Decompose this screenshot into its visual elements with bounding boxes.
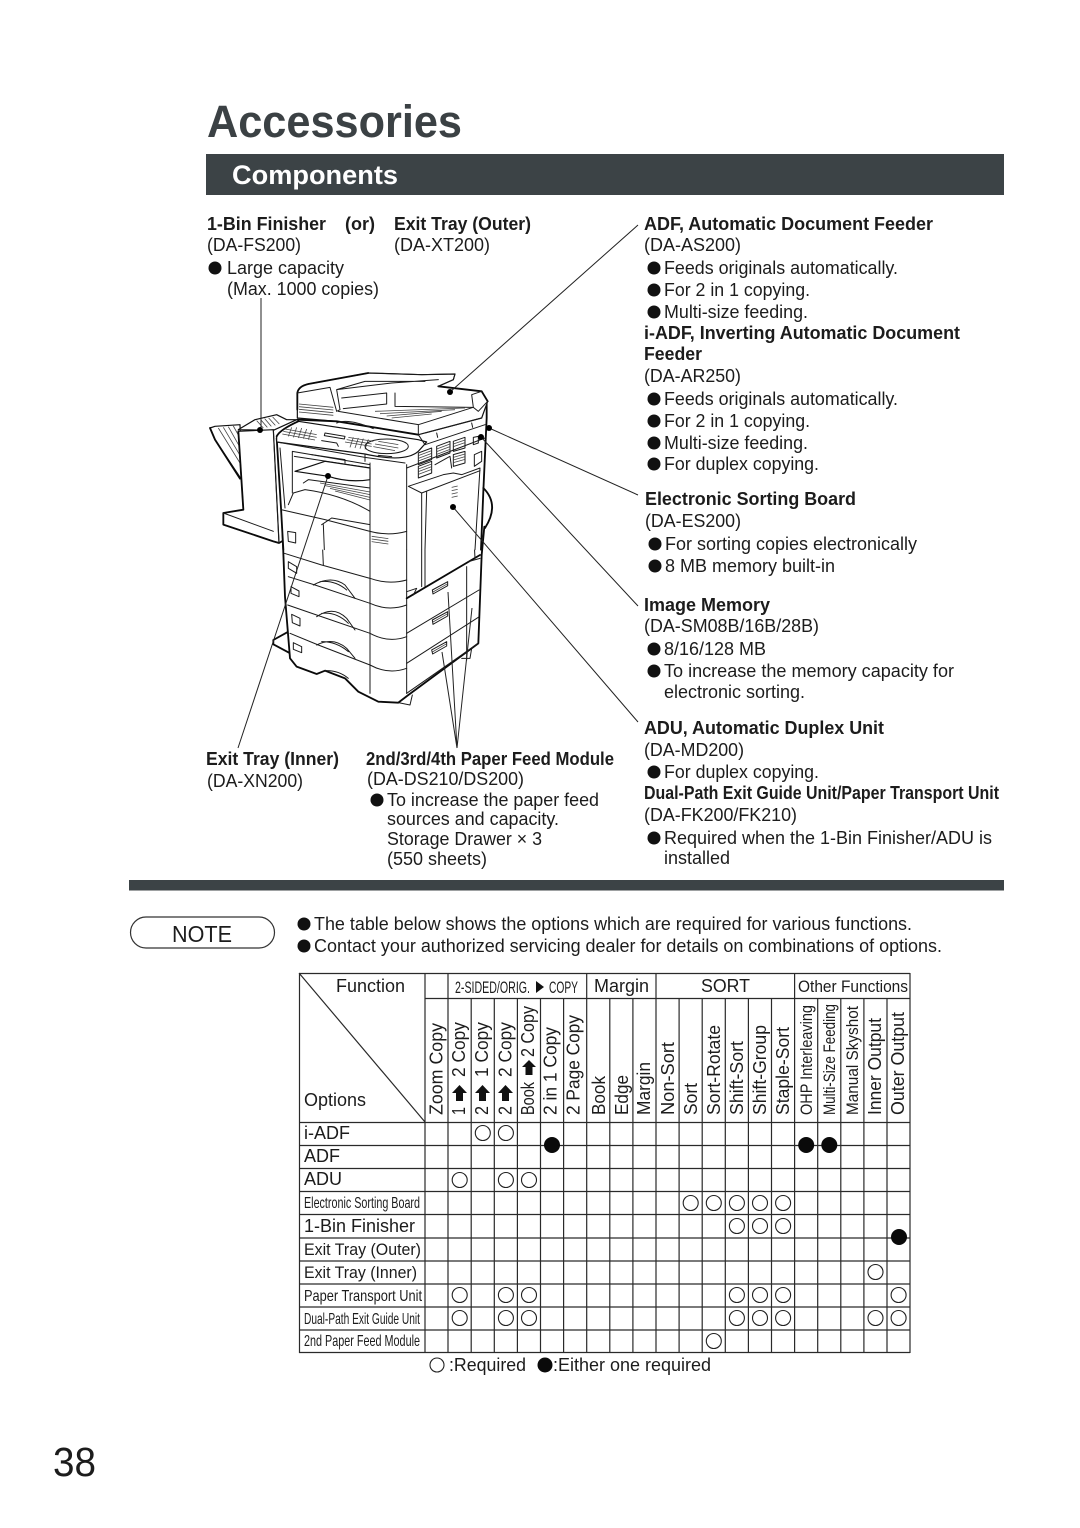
text block: ADF: Multi-size feeding. [664,302,808,322]
text block: image memory: electronic sorting. [664,682,805,702]
note badge: NOTE [172,921,232,947]
text block: image memory: 8/16/128 MB [664,639,766,659]
table group headers: COPY [549,978,578,997]
text block: i-ADF: For 2 in 1 copying. [664,411,810,431]
text block: finisher and exit tray outer: (DA-FS200) [207,235,301,255]
text block: paper feed module: Storage Drawer × 3 [387,829,542,849]
table group headers: Other Functions [798,977,908,996]
text block: exit tray inner [206,749,339,791]
text block: ADU and exit guide unit: installed [664,848,730,868]
text block: finisher and exit tray outer: (DA-XT200) [394,235,490,255]
text block: ADU and exit guide unit: (DA-MD200) [644,740,744,760]
text block: ADU and exit guide unit: ADU, Automatic Duplex Unit [644,718,884,738]
text block: paper feed module [366,749,614,869]
text block: exit tray inner: (DA-XN200) [207,771,303,791]
text block: image memory: (DA-SM08B/16B/28B) [644,616,819,636]
text block: i-ADF [644,323,960,474]
table row labels [304,1123,422,1350]
table legend: :Either one required [553,1355,711,1375]
text block: finisher and exit tray outer: 1-Bin Finisher [207,214,326,234]
text block: electronic sorting board: Electronic Sorting Board [645,489,856,509]
table column headers: Edge [612,1075,632,1115]
table column headers [426,1004,908,1115]
either-one markers [544,1137,907,1245]
table column headers: 2 [496,1106,516,1115]
table group headers: Margin [594,976,649,996]
table legend: :Required [449,1355,526,1375]
text block: i-ADF: Feeds originals automatically. [664,389,898,409]
text block: image memory: Image Memory [644,595,770,615]
illustration: copier with accessories [210,373,492,705]
table row labels: ADF [304,1146,340,1166]
text block: ADF: (DA-AS200) [644,235,741,255]
text block: ADF: ADF, Automatic Document Feeder [644,214,933,234]
table group headers: Options [304,1090,366,1110]
note text: Contact your authorized servicing dealer for details on combinations of options. [314,936,942,956]
table row labels: Exit Tray (Inner) [304,1263,417,1282]
table column headers: Margin [634,1062,654,1115]
text block: paper feed module: (550 sheets) [387,849,487,869]
text block: paper feed module: 2nd/3rd/4th Paper Feed Module [366,749,614,769]
table row labels: Dual-Path Exit Guide Unit [304,1311,420,1328]
table row labels: i-ADF [304,1123,350,1143]
text block: i-ADF: i-ADF, Inverting Automatic Document [644,323,960,343]
text block: i-ADF: Feeder [644,344,702,364]
text block: ADF [644,214,933,322]
table column headers: Shift-Sort [727,1041,747,1115]
table row labels: Electronic Sorting Board [304,1195,420,1212]
table group headers [304,976,908,1110]
text block: electronic sorting board: For sorting copies electronically [665,534,917,554]
options table [299,973,910,1353]
table grid [299,973,910,1353]
finisher and machine upper half [210,373,492,550]
table column headers: Staple-Sort [773,1027,793,1115]
table row labels: Paper Transport Unit [304,1288,422,1305]
note badge [130,917,274,948]
table column headers: Book [518,1081,538,1115]
machine lower half [273,527,484,705]
text block: finisher and exit tray outer [207,214,531,299]
table column headers: Book [589,1075,609,1115]
text block: ADU and exit guide unit [644,718,999,868]
table column headers: Non-Sort [658,1042,678,1115]
required markers [452,1126,906,1348]
heading band: components: Components [232,160,398,190]
note text [298,914,942,956]
text block: finisher and exit tray outer: (Max. 1000 copies) [227,279,379,299]
text block: finisher and exit tray outer: Large capacity [227,258,344,278]
text block: electronic sorting board [645,489,917,576]
text block: ADF: For 2 in 1 copying. [664,280,810,300]
divider bar [129,880,1004,890]
text block: ADU and exit guide unit: (DA-FK200/FK210) [644,805,797,825]
table column headers: Multi-Size Feeding [820,1004,839,1115]
table group headers: SORT [701,976,750,996]
table row labels: Exit Tray (Outer) [304,1240,421,1259]
text block: finisher and exit tray outer: Exit Tray (Outer) [394,214,531,234]
heading band: components [206,154,1004,195]
table column headers: 2 Copy [518,1006,538,1057]
text block: paper feed module: (DA-DS210/DS200) [367,769,524,789]
text block: image memory [644,595,954,702]
table column headers: 2 [472,1106,492,1115]
table column headers: Sort [681,1083,701,1115]
note text: The table below shows the options which are required for various functions. [314,914,912,934]
text block: finisher and exit tray outer: (or) [345,214,375,234]
table column headers: OHP Interleaving [797,1005,816,1115]
text block: paper feed module: sources and capacity. [387,809,559,829]
text block: paper feed module: To increase the paper feed [387,790,599,810]
leader lines and dots [238,225,638,748]
table column headers: 2 Copy [449,1022,469,1077]
table row labels: 1-Bin Finisher [304,1216,415,1236]
text block: electronic sorting board: (DA-ES200) [645,511,741,531]
table row labels: ADU [304,1169,342,1189]
text block: i-ADF: (DA-AR250) [644,366,741,386]
text block: ADU and exit guide unit: Dual-Path Exit Guide Unit/Paper Transport Unit [644,783,999,803]
table column headers: Manual Skyshot [843,1006,862,1115]
table column headers: Sort-Rotate [704,1025,724,1115]
text block: ADU and exit guide unit: For duplex copying. [664,762,819,782]
table column headers: 1 [449,1107,469,1115]
table column headers: 2 Page Copy [564,1015,584,1115]
text block: exit tray inner: Exit Tray (Inner) [206,749,339,769]
text block: image memory: To increase the memory capacity for [664,661,954,681]
table column headers: 2 Copy [496,1022,516,1077]
text block: i-ADF: Multi-size feeding. [664,433,808,453]
text block: ADU and exit guide unit: Required when the 1-Bin Finisher/ADU is [664,828,992,848]
table column headers: Zoom Copy [426,1023,446,1115]
text block: electronic sorting board: 8 MB memory built-in [665,556,835,576]
table column headers: Inner Output [865,1018,885,1115]
table column headers: Outer Output [888,1012,908,1115]
text block: i-ADF: For duplex copying. [664,454,819,474]
table column headers: 2 in 1 Copy [540,1027,560,1115]
table column headers: 1 Copy [472,1022,492,1077]
table legend [430,1355,711,1375]
table row labels: 2nd Paper Feed Module [304,1333,420,1350]
table group headers: Function [336,976,405,996]
page number: 38 [53,1439,96,1485]
table column headers: Shift-Group [750,1025,770,1115]
table group headers: 2-SIDED/ORIG. [455,978,530,997]
title: Accessories [207,96,462,147]
text block: ADF: Feeds originals automatically. [664,258,898,278]
